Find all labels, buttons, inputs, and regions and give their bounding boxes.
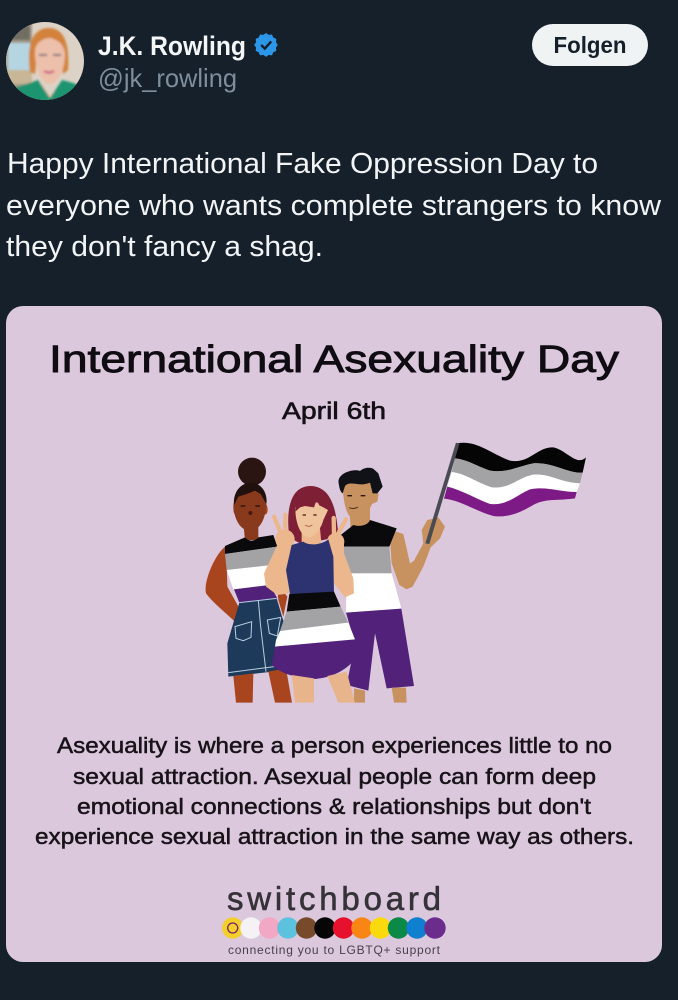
tweet text: everyone who wants complete strangers to know [6, 190, 662, 222]
description text: sexual attraction. Asexual people can form deep [73, 764, 596, 789]
description text: Asexuality is where a person experiences little to no [57, 733, 612, 758]
follow button: Folgen [554, 32, 626, 58]
heading: International Asexuality Day [49, 339, 619, 381]
character: woman centre [264, 486, 358, 703]
logo tagline: connecting you to LGBTQ+ support [228, 943, 441, 957]
avatar: profile photo [6, 22, 84, 102]
follow button [532, 24, 648, 66]
tweet text [6, 148, 662, 263]
author name: J.K. Rowling [98, 31, 246, 61]
date: April 6th [282, 398, 386, 425]
logo: rainbow dots [222, 917, 446, 939]
illustration: three friends with asexual flag [206, 443, 586, 703]
character: woman left [206, 458, 292, 703]
description text: emotional connections & relationships but don't [77, 794, 591, 819]
panel: International Asexuality Day card [6, 306, 662, 962]
logo wordmark: switchboard [227, 880, 441, 917]
icon: asexual pride flag [444, 443, 586, 516]
tweet text: Happy International Fake Oppression Day to [7, 148, 598, 180]
tweet text: they don't fancy a shag. [6, 231, 323, 263]
description text [35, 733, 634, 849]
author handle: @jk_rowling [98, 63, 237, 93]
icon: flag pole [425, 443, 459, 544]
icon: verified badge [254, 33, 278, 57]
character: man right [338, 468, 445, 703]
description text: experience sexual attraction in the same way as others. [35, 824, 634, 849]
logo: switchboard [222, 880, 446, 957]
